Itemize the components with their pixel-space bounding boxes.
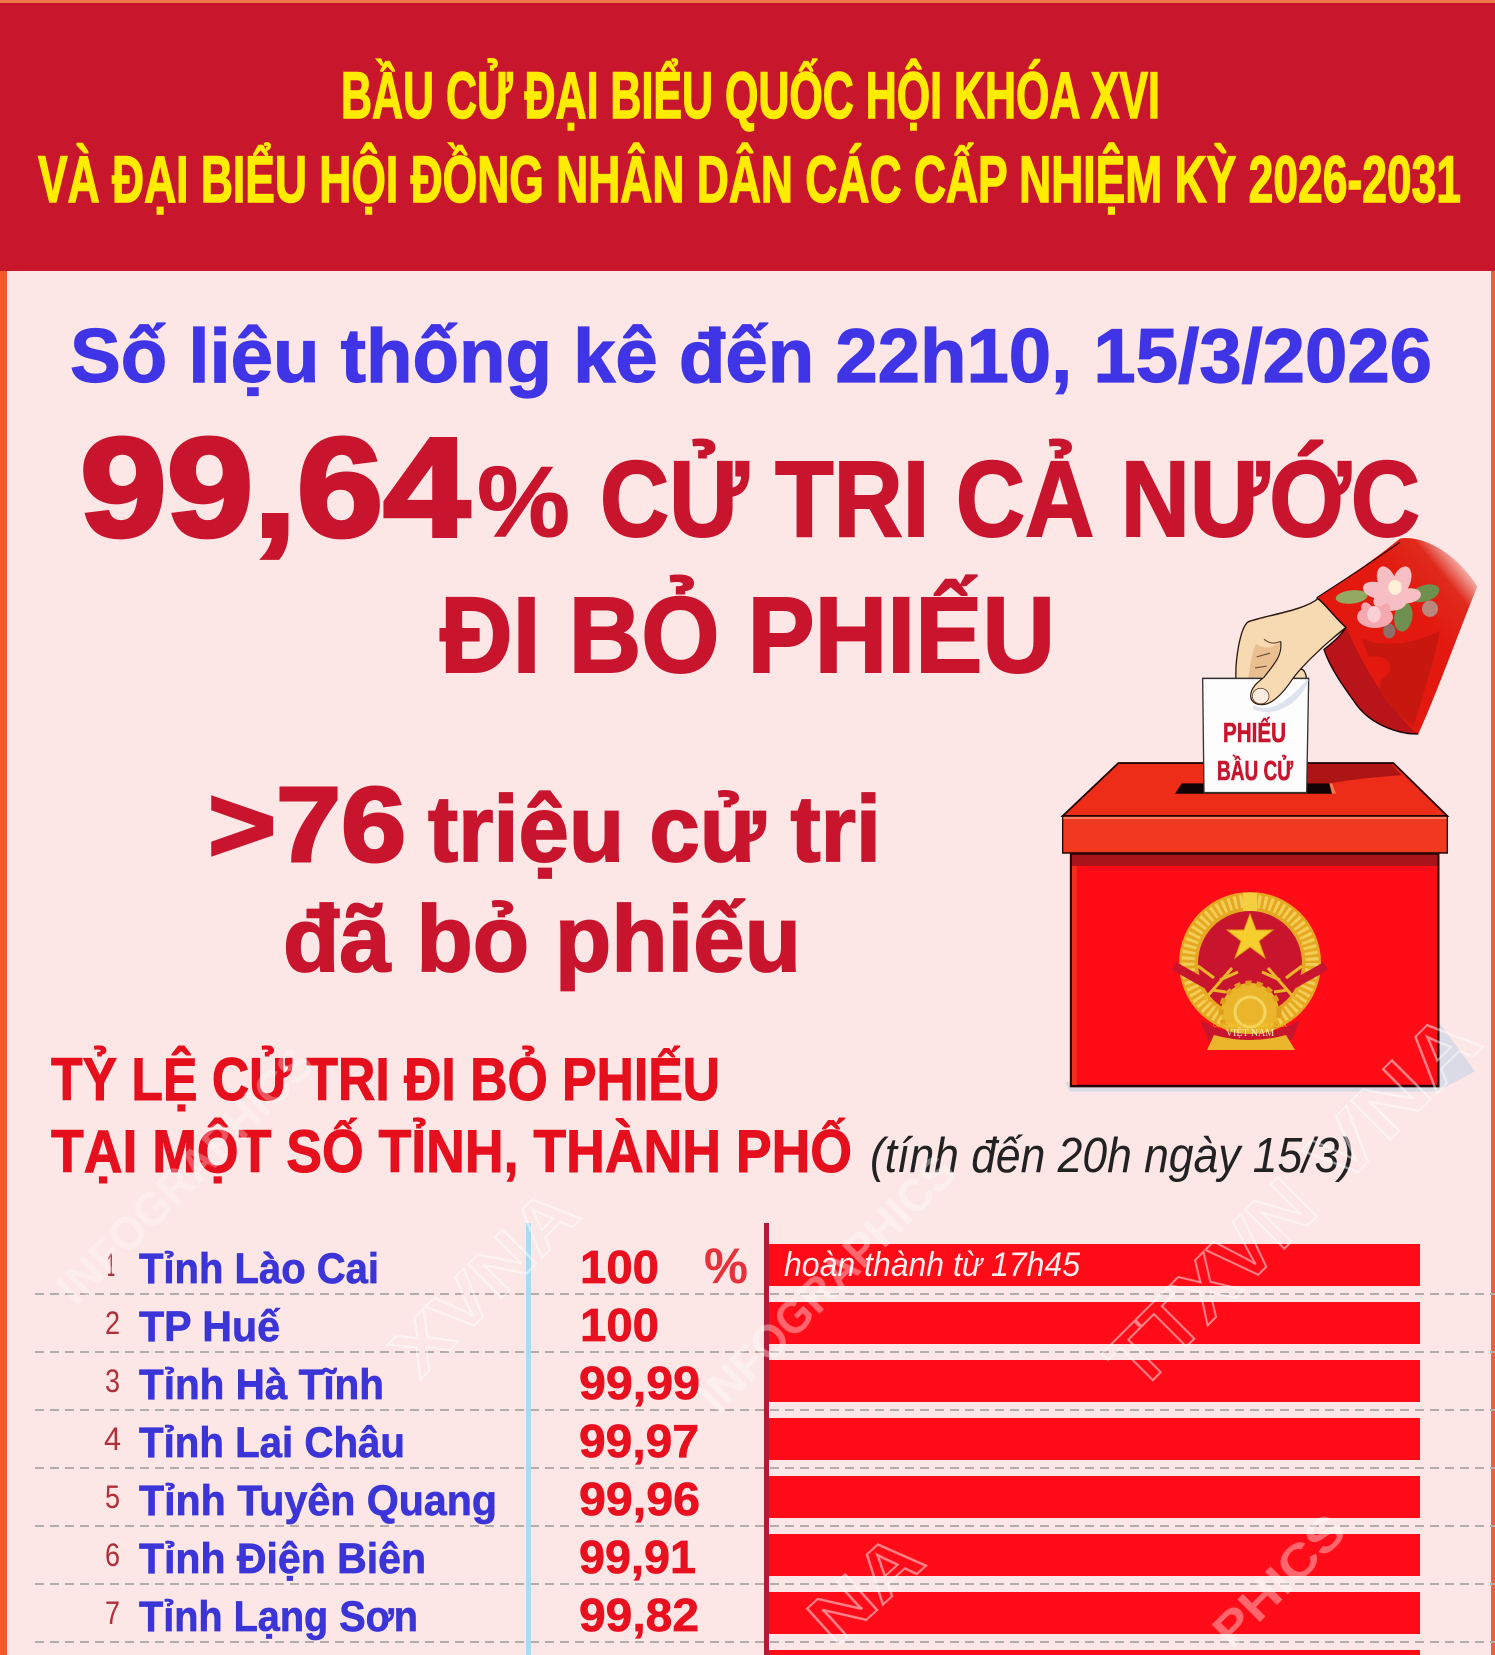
stat: voters who have voted <box>208 766 881 991</box>
row 3 <box>105 1357 700 1409</box>
bar note: hoàn thành từ 17h45 <box>784 1246 1080 1284</box>
section heading: turnout by province <box>51 1046 1354 1185</box>
watermarks: VNA <box>1289 994 1495 1202</box>
national emblem <box>1174 892 1326 1050</box>
row 2 <box>105 1299 659 1351</box>
row 2: 2 <box>105 1305 120 1341</box>
row 1: Tỉnh Lào Cai <box>139 1245 379 1293</box>
row 4: 99,97 <box>579 1415 699 1467</box>
subtitle: data timestamp: Số liệu thống kê đến 22h10, 15/3/2026 <box>70 314 1432 399</box>
emblem motto: CỘNG HÒA XÃ HỘI CHỦ NGHĨA <box>1213 1023 1287 1029</box>
watermarks: INFOGRAPHICS <box>688 1145 965 1422</box>
illustration: hand casting ballot into box <box>1063 538 1477 1092</box>
row 1: 100 <box>580 1241 659 1293</box>
row 7: 7 <box>105 1595 120 1631</box>
bars <box>769 1244 1420 1655</box>
row 6: Tỉnh Điện Biên <box>139 1535 426 1583</box>
row 7: 99,82 <box>579 1589 699 1641</box>
voter caption: đã bỏ phiếu <box>283 886 801 991</box>
row 7: Tỉnh Lạng Sơn <box>139 1593 418 1641</box>
row 4: 4 <box>104 1421 121 1457</box>
emblem star <box>1227 914 1273 958</box>
row 5 <box>105 1473 700 1525</box>
turnout figure: 99,64 <box>80 408 470 566</box>
row 3: 3 <box>105 1363 120 1399</box>
voter count: >76 <box>208 766 406 884</box>
headline line 2: ĐI BỎ PHIẾU <box>440 574 1055 695</box>
ballot paper <box>1203 678 1309 793</box>
box lid <box>1063 763 1447 853</box>
row 5: Tỉnh Tuyên Quang <box>139 1477 497 1525</box>
row 7 <box>105 1589 699 1641</box>
ballot text: BẦU CỬ <box>1217 754 1294 786</box>
heading line 1: TỶ LỆ CỬ TRI ĐI BỎ PHIẾU <box>51 1046 720 1113</box>
watermarks: PHICS <box>1202 1504 1356 1655</box>
row 6: 6 <box>105 1537 120 1573</box>
ballot text: PHIẾU <box>1223 717 1286 748</box>
row 1: 1 <box>107 1247 115 1283</box>
voter unit: triệu cử tri <box>428 776 881 881</box>
embroidered sleeve <box>1317 538 1477 734</box>
row 2: 100 <box>580 1299 659 1351</box>
emblem country name: VIỆT NAM <box>1226 1027 1274 1039</box>
row 3: 99,99 <box>579 1357 700 1409</box>
heading line 2: TẠI MỘT SỐ TỈNH, THÀNH PHỐ <box>51 1118 852 1185</box>
box shadow <box>1065 1019 1475 1092</box>
watermarks: XVNA <box>375 1173 593 1391</box>
heading note: (tính đến 20h ngày 15/3) <box>870 1129 1354 1183</box>
hand behind ballot <box>1236 598 1346 680</box>
row 6: 99,91 <box>579 1531 696 1583</box>
header banner <box>0 0 1495 271</box>
bar chart: turnout by province <box>35 1223 1495 1655</box>
row 4 <box>104 1415 699 1467</box>
watermarks <box>46 994 1495 1655</box>
headline: national turnout <box>80 408 1420 695</box>
chart axis <box>764 1223 769 1655</box>
box body <box>1071 855 1438 1086</box>
row 4: Tỉnh Lai Châu <box>139 1419 405 1467</box>
row 6 <box>105 1531 696 1583</box>
row 5: 99,96 <box>579 1473 700 1525</box>
row 3: Tỉnh Hà Tĩnh <box>139 1361 384 1409</box>
row 2: TP Huế <box>139 1303 280 1351</box>
watermarks: TTXVN <box>1089 1162 1332 1405</box>
watermarks: INFOGRAPHICS <box>46 1037 323 1314</box>
percent unit: % <box>704 1238 748 1294</box>
thumb <box>1251 612 1346 705</box>
ballot text <box>1217 717 1294 786</box>
lotus flowers on sleeve <box>1335 563 1441 638</box>
row 1 <box>107 1241 659 1293</box>
percent sign: % <box>477 446 570 558</box>
row 5: 5 <box>105 1479 120 1515</box>
